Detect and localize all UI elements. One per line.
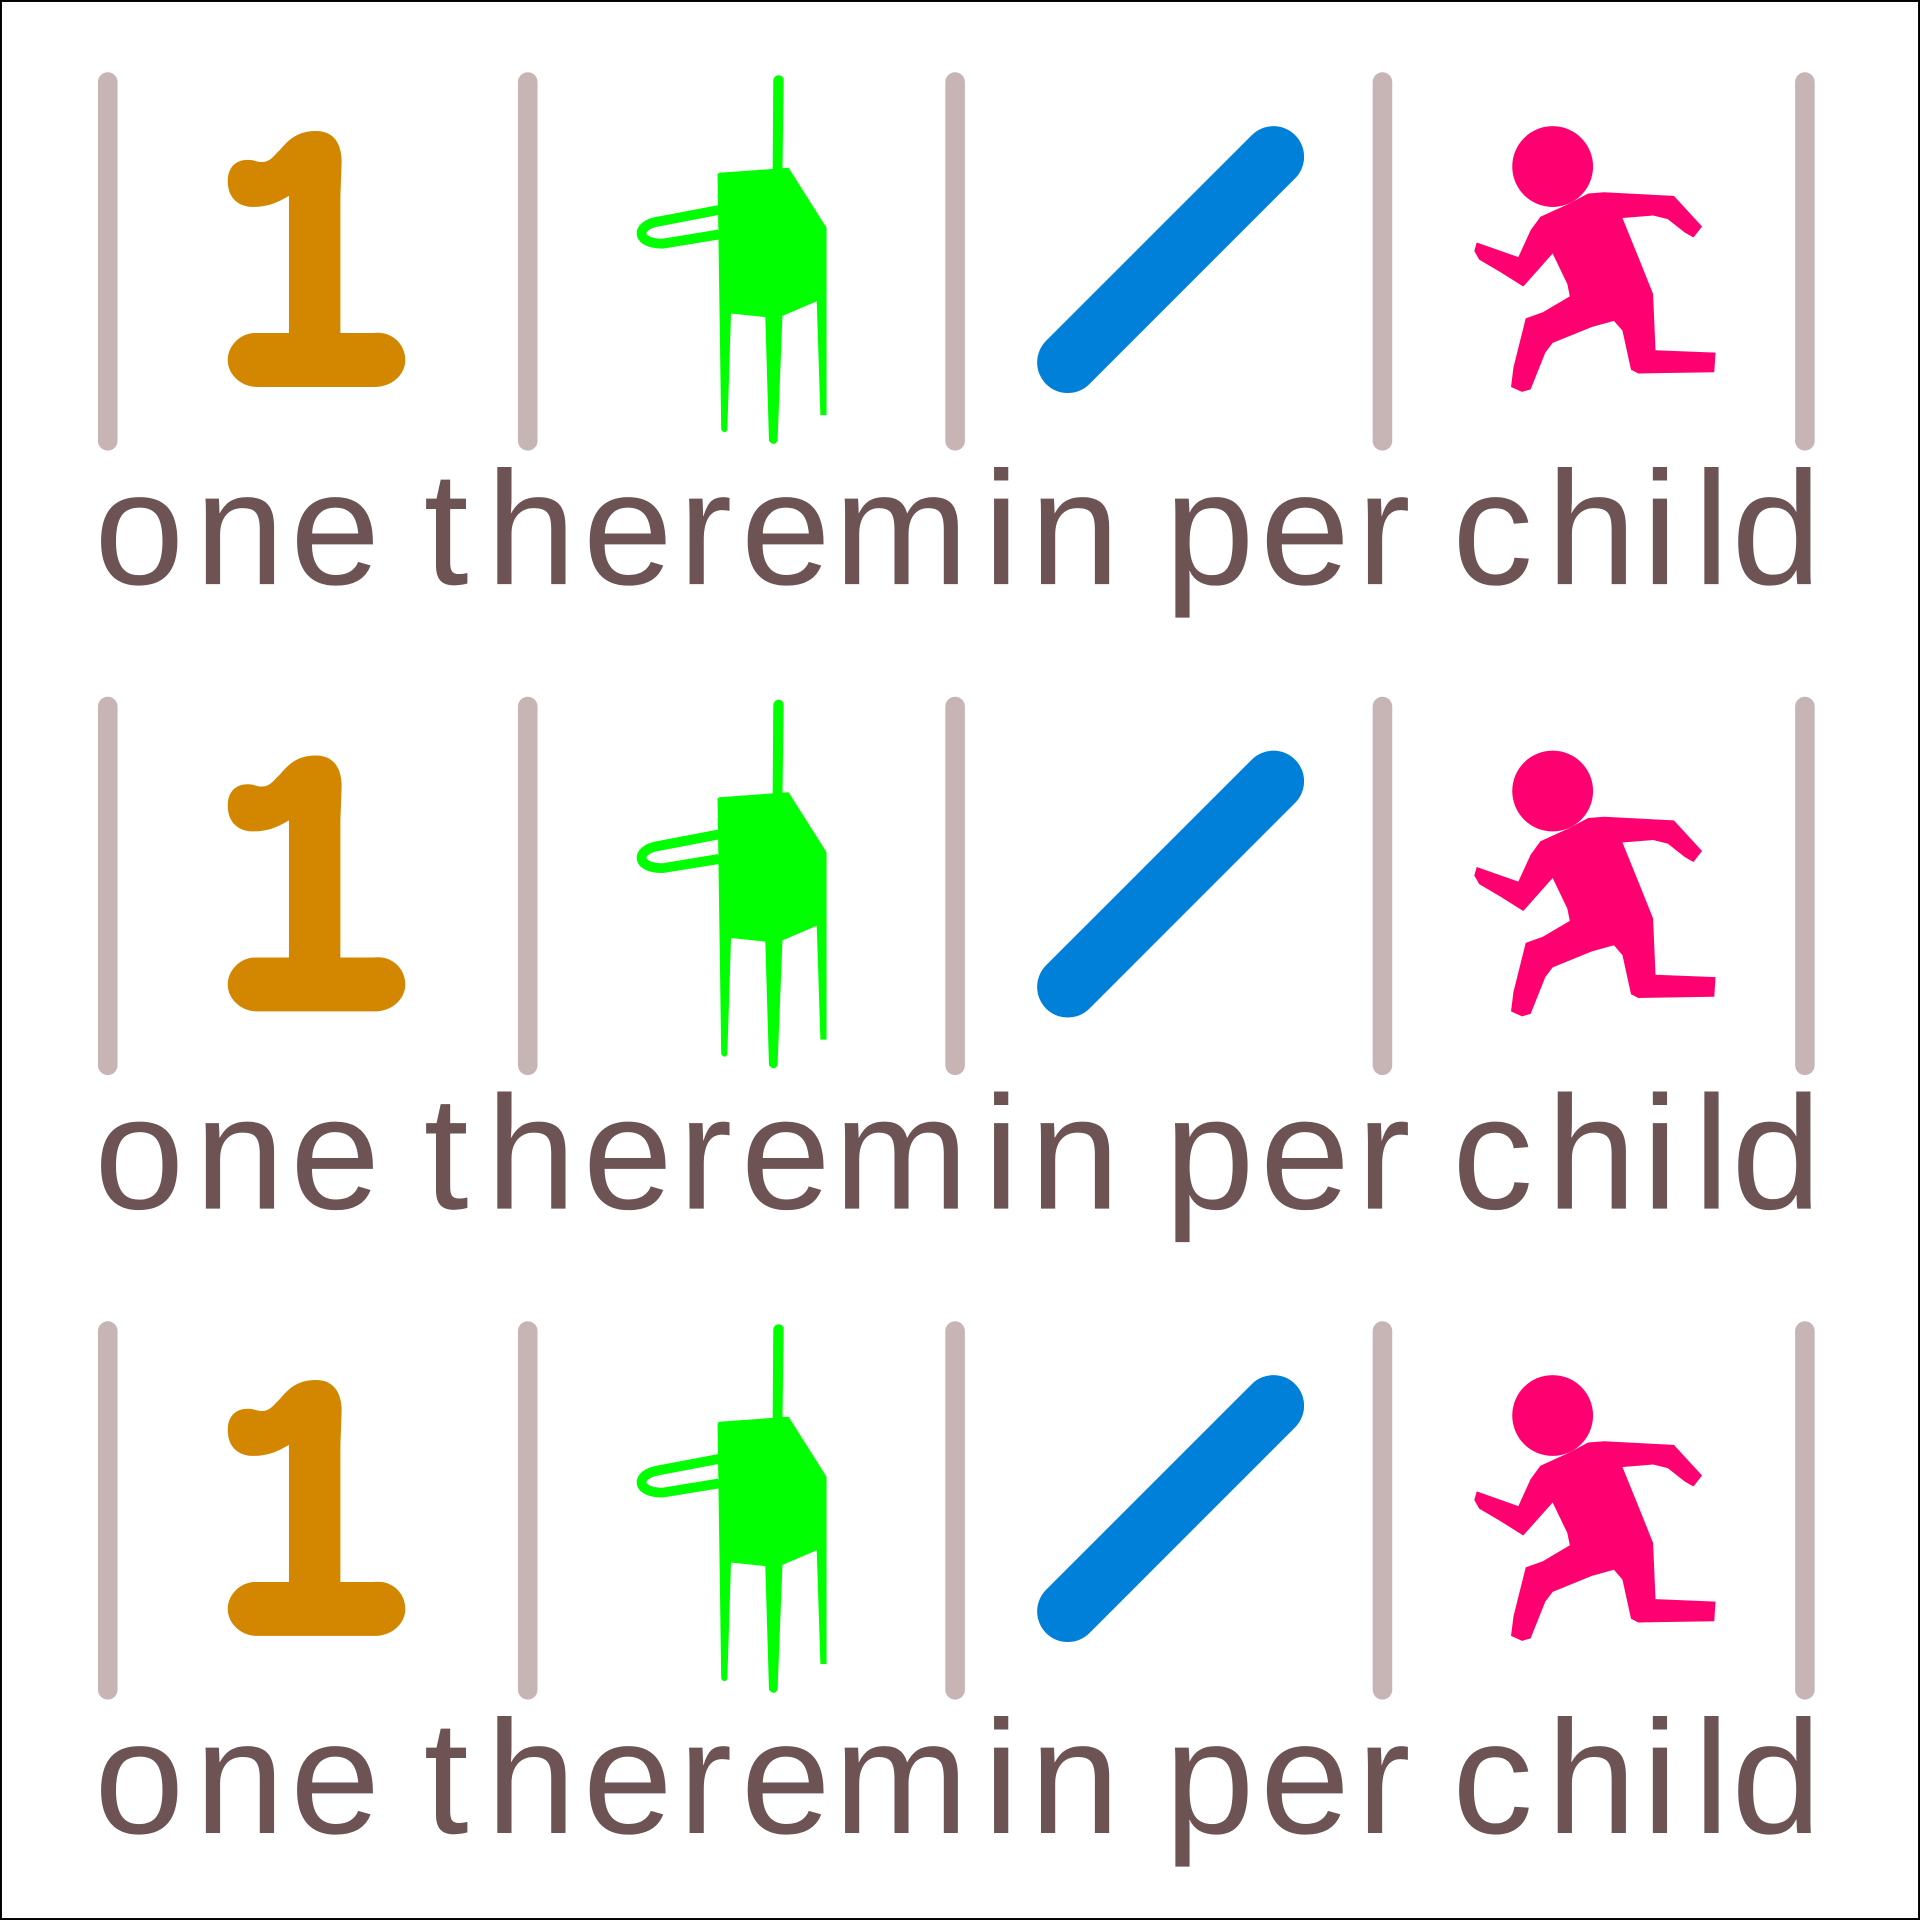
row 2 dividers	[108, 707, 1805, 1065]
caption: one theremin per child	[94, 439, 1821, 619]
icon: running child	[1474, 1375, 1716, 1641]
caption: one theremin per child	[94, 1688, 1821, 1868]
caption: one theremin per child	[94, 1064, 1821, 1244]
icon: theremin	[642, 1324, 827, 1693]
icon: numeral one	[228, 756, 405, 1011]
row 2	[94, 700, 1821, 1244]
icon: slash	[1068, 157, 1273, 362]
icon: theremin	[642, 75, 827, 444]
row 1	[94, 75, 1821, 619]
icon: slash	[1068, 781, 1273, 987]
icon: slash	[1068, 1406, 1273, 1611]
icon: running child	[1474, 751, 1716, 1016]
icon: theremin	[642, 700, 827, 1068]
row 3 dividers	[108, 1331, 1805, 1690]
row 3	[94, 1324, 1821, 1868]
row 1 dividers	[108, 82, 1805, 441]
icon: running child	[1474, 126, 1716, 392]
icon: numeral one	[228, 1380, 405, 1636]
icon: numeral one	[228, 131, 405, 387]
